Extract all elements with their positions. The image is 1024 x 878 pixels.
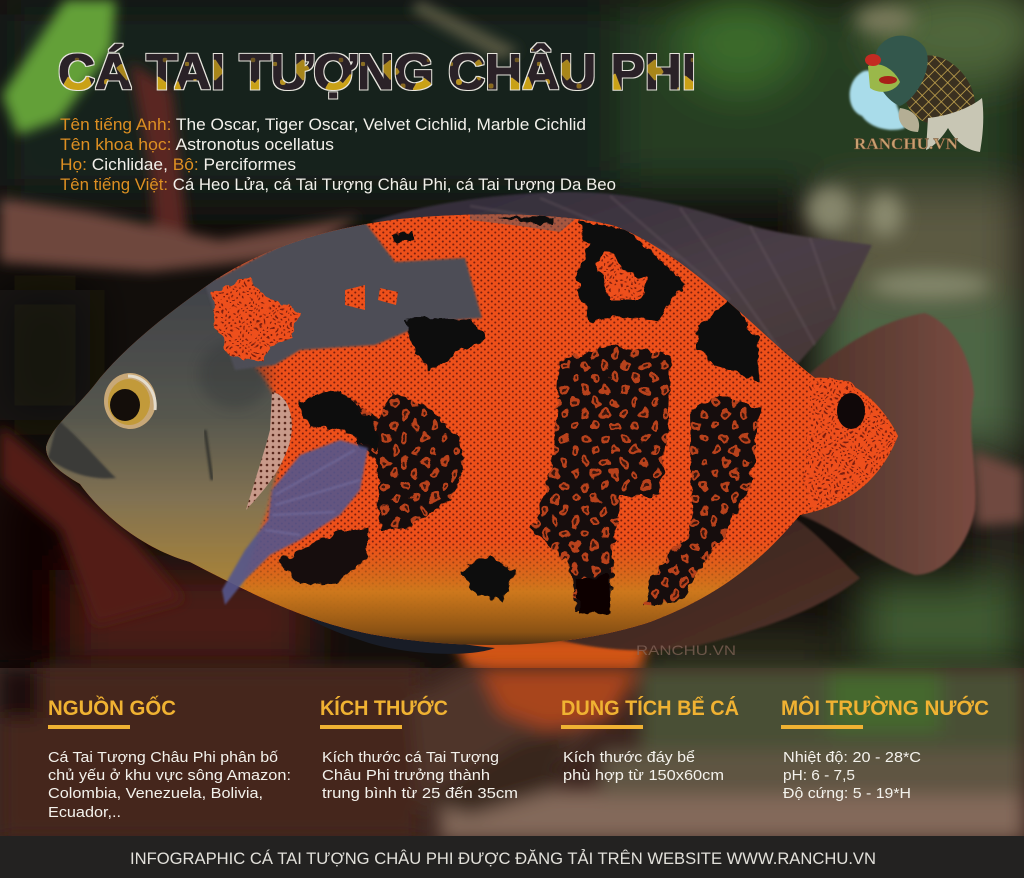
underline bbox=[561, 725, 643, 729]
footer bar bbox=[0, 836, 1024, 878]
body text bbox=[322, 749, 518, 802]
caudal eye spot bbox=[837, 393, 865, 429]
heading: DUNG TÍCH BỂ CÁ bbox=[561, 697, 739, 720]
underline bbox=[781, 725, 863, 729]
scientific name: Tên khoa học: Astronotus ocellatus bbox=[60, 136, 334, 154]
body text bbox=[783, 749, 921, 802]
family and order: Họ: Cichlidae, Bộ: Perciformes bbox=[60, 156, 296, 174]
underline bbox=[320, 725, 402, 729]
underline bbox=[48, 725, 130, 729]
body text: Nhiệt độ: 20 - 28*C bbox=[783, 749, 921, 766]
heading: KÍCH THƯỚC bbox=[320, 696, 448, 720]
ventral fin bbox=[298, 610, 495, 654]
species info block bbox=[60, 116, 616, 194]
orange nape patch bbox=[213, 277, 300, 362]
body text bbox=[48, 749, 291, 821]
body text: Kích thước cá Tai Tượng bbox=[322, 749, 499, 766]
vietnamese names: Tên tiếng Việt: Cá Heo Lửa, cá Tai Tượng Châu Phi, cá Tai Tượng Da Beo bbox=[60, 176, 616, 194]
body text: Ecuador,.. bbox=[48, 804, 121, 821]
watermark: RANCHU.VN bbox=[636, 642, 736, 658]
pectoral fin bbox=[222, 440, 368, 605]
body text: Kích thước đáy bể bbox=[563, 749, 695, 766]
caudal peduncle patch bbox=[806, 379, 895, 505]
grey back bbox=[205, 222, 482, 370]
body text: trung bình từ 25 đến 35cm bbox=[322, 785, 518, 802]
belly glow bbox=[201, 546, 766, 645]
head bbox=[40, 270, 290, 590]
bottom panel background bbox=[0, 668, 1024, 840]
body text: phù hợp từ 150x60cm bbox=[563, 767, 724, 784]
body text: chủ yếu ở khu vực sông Amazon: bbox=[48, 767, 291, 784]
mouth bbox=[48, 420, 116, 478]
logo: ranchu.vn: RANCHU.VN bbox=[854, 136, 958, 153]
logo: ranchu.vn bbox=[850, 36, 983, 153]
gill edge bbox=[246, 392, 292, 510]
head shadow bbox=[199, 341, 271, 409]
panel: dung tích bể cá bbox=[561, 697, 739, 784]
heading: MÔI TRƯỜNG NƯỚC bbox=[781, 696, 989, 720]
eye bbox=[104, 373, 156, 429]
body text: Colombia, Venezuela, Bolivia, bbox=[48, 785, 263, 802]
title: CÁ TAI TƯỢNG CHÂU PHI bbox=[58, 44, 696, 100]
heading: NGUỒN GỐC bbox=[48, 696, 176, 720]
tail fin bbox=[800, 313, 975, 575]
fish body bbox=[40, 200, 920, 660]
panel: nguồn gốc bbox=[48, 696, 291, 821]
body text: Cá Tai Tượng Châu Phi phân bố bbox=[48, 749, 279, 766]
footer text: INFOGRAPHIC CÁ TAI TƯỢNG CHÂU PHI ĐƯỢC ĐĂNG TẢI TRÊN WEBSITE WWW.RANCHU.VN bbox=[130, 849, 876, 868]
black patches bbox=[280, 216, 760, 615]
body text: Châu Phi trưởng thành bbox=[322, 767, 490, 784]
panel: môi trường nước bbox=[781, 696, 989, 802]
body text bbox=[563, 749, 724, 784]
anal fin bbox=[560, 515, 860, 650]
english name: Tên tiếng Anh: The Oscar, Tiger Oscar, Velvet Cichlid, Marble Cichlid bbox=[60, 116, 586, 134]
orange scaled flank bbox=[200, 210, 920, 640]
dorsal fin bbox=[370, 192, 872, 368]
body text: pH: 6 - 7,5 bbox=[783, 767, 855, 784]
fish bbox=[40, 192, 975, 660]
panel: kích thước bbox=[320, 696, 518, 802]
body text: Độ cứng: 5 - 19*H bbox=[783, 785, 911, 802]
